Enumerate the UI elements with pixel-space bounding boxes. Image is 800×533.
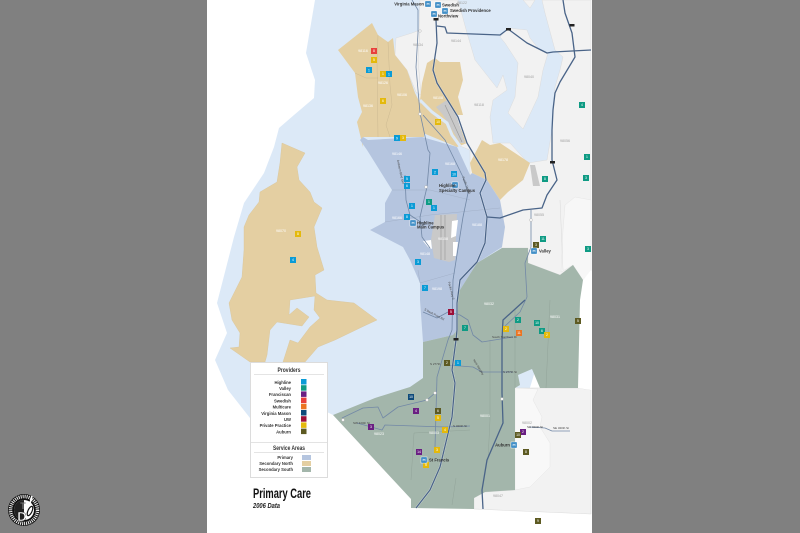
markers: Multicare [516, 330, 522, 336]
hospitals: Auburn [495, 442, 510, 448]
markers: Valley: 11 [541, 237, 545, 241]
hospitals: Main Campus [417, 224, 445, 230]
map: zip code labels: 98158 [438, 237, 448, 241]
legend list: service areas [259, 455, 311, 472]
legend list: service areas: Secondary North [259, 461, 293, 466]
map: zip code labels: 98118 [474, 103, 484, 107]
markers: Highline [290, 67, 461, 366]
markers: Franciscan [368, 408, 526, 455]
legend heading: Service Areas: Service Areas [273, 446, 306, 452]
map: zip code labels: 98122 [457, 1, 467, 5]
markers: Private Practice: 10 [436, 120, 440, 124]
markers: Private Practice: 2 [505, 327, 507, 331]
markers: Private Practice: 5 [425, 463, 427, 467]
hospitals: Highline [439, 183, 456, 188]
hospitals: Northview [438, 14, 459, 18]
markers: Multicare: 11 [517, 331, 521, 335]
legend list: providers: Auburn [276, 429, 291, 434]
legend list: providers: Highline [274, 380, 292, 385]
markers: UW [448, 309, 454, 315]
markers: Auburn: 5 [577, 319, 579, 323]
map: Duwamish river [420, 100, 460, 146]
map: zip code labels: 98116 [358, 49, 368, 53]
map: road labels: Pacific Hwy S [461, 176, 472, 194]
map: white land east of south area [578, 270, 591, 390]
markers: Highline: 2 [434, 170, 436, 174]
map: secondary north West Seattle [338, 23, 424, 147]
legend list: providers: Multicare [273, 405, 292, 410]
markers: Auburn [435, 242, 581, 524]
markers: Private Practice: 4 [444, 428, 446, 432]
legend list: providers: Swedish [274, 398, 291, 403]
map: zip code labels: 98108 [433, 96, 443, 100]
hospitals: Valley [539, 248, 552, 254]
legend heading: Providers: Providers [278, 367, 301, 374]
hospitals: H [512, 443, 516, 448]
map: secondary north Rainier Beach [470, 140, 530, 200]
markers: Swedish: 8 [373, 49, 375, 53]
markers: Valley: 8 [544, 177, 546, 181]
map: zip code labels: 98002 [522, 421, 532, 425]
hospitals: H [411, 221, 415, 226]
map: road labels [353, 159, 569, 430]
map: road labels: S 277th [430, 362, 441, 366]
map: road labels: South Star/Kent Dr [492, 335, 517, 339]
map: zip code labels: 98136 [363, 104, 373, 108]
legend list: providers: UW [284, 417, 291, 422]
map: zip code labels: 98070 [276, 229, 286, 233]
markers: Swedish [371, 48, 377, 54]
map: road labels: SE 320th St [553, 426, 569, 430]
markers: Highline: 9 [396, 136, 398, 140]
map: zip code labels: 98047 [493, 494, 503, 498]
map: state routes [342, 0, 570, 447]
map: zip code labels: 98055 [534, 213, 544, 217]
markers: Auburn: 8 [525, 450, 527, 454]
markers: Highline: 1 [368, 68, 370, 72]
markers: Virginia Mason: 10 [409, 395, 413, 399]
map: Puget Sound water [215, 0, 591, 420]
hospitals: H [443, 9, 447, 14]
markers: Franciscan: 4 [415, 409, 417, 413]
map: zip code labels: 98040 [524, 75, 534, 79]
legend list: providers: Franciscan [269, 392, 291, 397]
markers: Highline: 7 [424, 286, 426, 290]
hospitals: Specialty Campus [439, 188, 476, 193]
map: zip code labels: 98106 [397, 93, 407, 97]
hospitals: H [432, 12, 436, 17]
map: zip code labels [276, 1, 570, 498]
markers: Highline: 5 [406, 177, 408, 181]
map: zip code labels: 98031 [550, 315, 560, 319]
legend panel [250, 362, 328, 478]
map: surrounding land [395, 0, 591, 514]
markers: Private Practice: 5 [437, 416, 439, 420]
map: road labels: Ambaum Blvd SW [396, 159, 405, 184]
map: zip code labels: 98178 [498, 158, 508, 162]
markers: Highline: 1 [388, 72, 390, 76]
markers: Highline: 4 [292, 258, 294, 262]
map: secondary north Beacon Hill [420, 58, 467, 147]
map: zip code labels: 98134 [413, 43, 423, 47]
map: zip code labels: 98003 [429, 431, 439, 435]
map: road labels: S 320th St [453, 424, 467, 428]
map: zip code labels: 98126 [378, 81, 388, 85]
markers: UW: 5 [450, 310, 452, 314]
map: zip code labels: 98148 [420, 252, 430, 256]
map: zip code labels: 98168 [445, 162, 455, 166]
markers: Private Practice: 2 [546, 333, 548, 337]
title: Primary Care [253, 486, 311, 501]
map: zip code labels: 98198 [432, 287, 442, 291]
subtitle: 2006 Data [252, 501, 280, 510]
markers: Highline: 1 [433, 206, 435, 210]
map: zip code labels: 98144 [451, 39, 461, 43]
map: highway shields and interchange icons [342, 18, 574, 422]
markers: Auburn: 3 [535, 243, 537, 247]
hospitals [394, 1, 552, 463]
markers: Highline: 8 [406, 215, 408, 219]
hospitals: H [426, 2, 430, 7]
markers: Auburn: 2 [446, 361, 448, 365]
markers: Private Practice: 5 [373, 58, 375, 62]
markers: Valley: 1 [428, 200, 430, 204]
map: road labels: S 277th St [503, 370, 517, 374]
markers: Valley [426, 102, 591, 334]
hospitals: Swedish Providence [450, 8, 491, 13]
markers: Private Practice [295, 57, 550, 468]
markers: Private Practice: 6 [382, 99, 384, 103]
markers: Highline: 1 [457, 361, 459, 365]
markers: Valley: 3 [587, 247, 589, 251]
map: zip code labels: 98188 [472, 223, 482, 227]
hospitals: H [453, 183, 457, 188]
logo badge [8, 494, 40, 526]
markers: Virginia Mason [408, 394, 414, 400]
markers: Franciscan: 14 [417, 450, 421, 454]
markers: Valley: 2 [517, 318, 519, 322]
markers: Franciscan: 2 [522, 430, 524, 434]
markers: Valley: 10 [535, 321, 539, 325]
map: road labels: Pacific Hwy S [447, 281, 455, 300]
map: road labels: SE 320th St [527, 425, 543, 429]
markers: Private Practice: 8 [297, 232, 299, 236]
hospitals: Swedish [442, 2, 459, 8]
markers: Valley: 4 [581, 103, 583, 107]
legend list: service areas: Primary [277, 455, 294, 460]
markers: Private Practice: 3 [436, 448, 438, 452]
map: zip code labels: 98001 [480, 414, 490, 418]
map: secondary south service area [333, 248, 583, 509]
markers: Highline: 10 [452, 172, 456, 176]
markers: Auburn: 10 [516, 433, 520, 437]
hospitals: Virginia Mason [394, 2, 424, 6]
markers: Highline: 6 [406, 184, 408, 188]
map: interstate highways [416, 0, 591, 509]
markers: Franciscan: 3 [370, 425, 372, 429]
markers: Auburn: 9 [537, 519, 539, 523]
map: road labels: SW 320th St [353, 421, 370, 425]
logo badge: T [20, 501, 26, 511]
legend list: providers: Virginia Mason [261, 411, 291, 416]
markers: Private Practice: 1 [382, 72, 384, 76]
hospitals: H [532, 249, 536, 254]
markers: Valley: 1 [586, 155, 588, 159]
markers: Valley: 6 [541, 329, 543, 333]
map: Vashon Island secondary north area [229, 143, 377, 362]
map: zip code labels: 98032 [484, 302, 494, 306]
map: primary service area [360, 137, 505, 342]
logo badge: D [17, 509, 27, 524]
hospitals: Highline [417, 220, 434, 226]
map: road labels: S Dash Point Rd [424, 307, 445, 321]
legend list: service areas: Secondary South [259, 467, 293, 472]
map: zip code labels: 98023 [374, 432, 384, 436]
map: zip code labels: 98146 [392, 152, 402, 156]
markers: Valley: 3 [585, 176, 587, 180]
map: airport and industrial strips [423, 100, 540, 262]
markers: Highline: 1 [411, 204, 413, 208]
markers: Private Practice: 3 [402, 136, 404, 140]
hospitals: St Francis [429, 458, 450, 462]
hospitals: H [422, 458, 426, 463]
legend list: providers [260, 379, 306, 434]
markers: Highline: 3 [417, 260, 419, 264]
page sheet [207, 0, 592, 533]
markers: Auburn: 6 [437, 409, 439, 413]
map: zip code labels: 98166 [392, 216, 402, 220]
map: zip code labels: 98056 [560, 139, 570, 143]
hospitals: H [436, 3, 440, 8]
legend list: providers: Valley [279, 386, 292, 391]
markers: Valley: 7 [464, 326, 466, 330]
map: road labels: Kent Kangley [472, 358, 485, 376]
map: zip boundaries [355, 35, 563, 505]
legend list: providers: Private Practice [260, 423, 292, 428]
